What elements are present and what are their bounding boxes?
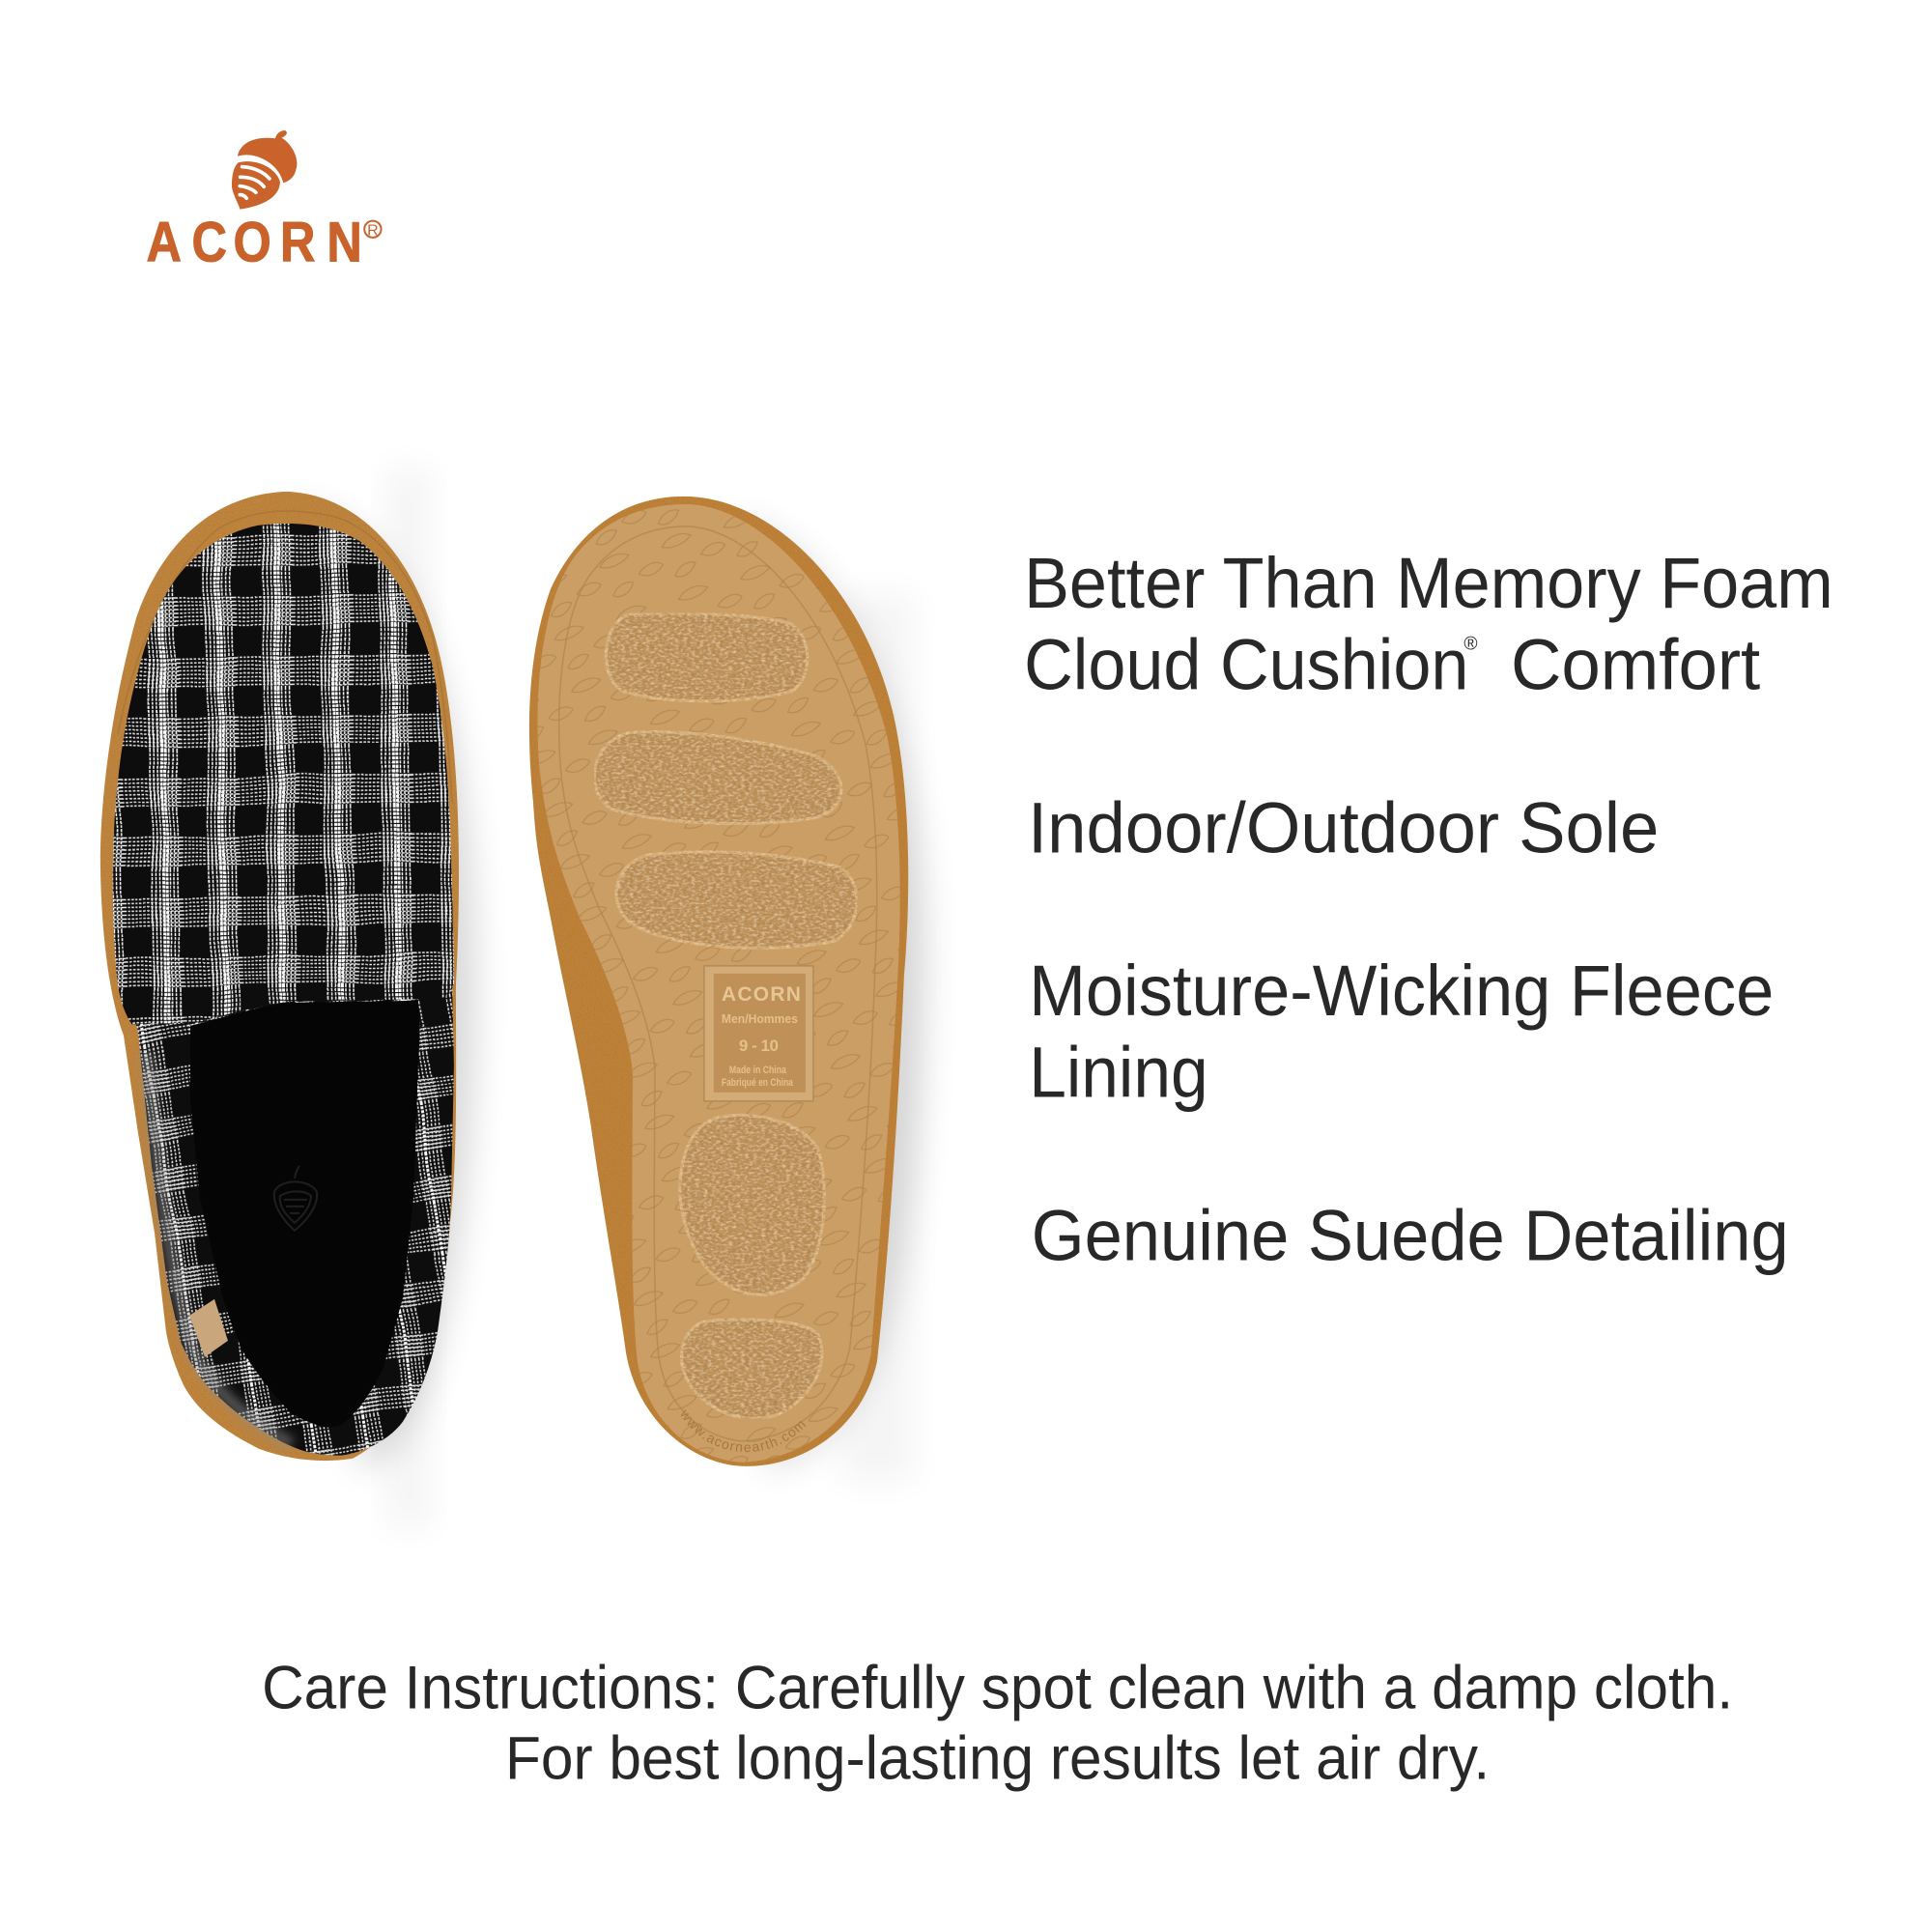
feature: cloud cushion: ® bbox=[1463, 635, 1477, 655]
stamp size text: Fabriqué en China bbox=[722, 1077, 794, 1089]
stamp size text: Made in China bbox=[729, 1065, 787, 1076]
registered mark: R bbox=[367, 223, 379, 240]
feature: fleece lining bbox=[1029, 951, 1774, 1113]
collar: plaid sides bbox=[136, 987, 454, 1456]
pad 3 bbox=[616, 852, 857, 948]
stamp wordmark: ACORN bbox=[722, 983, 801, 1006]
smooth tan sole bbox=[538, 504, 900, 1463]
pad 2 bbox=[594, 732, 841, 824]
feature: cloud cushion: Cloud Cushion bbox=[1024, 625, 1468, 705]
care instructions: Care Instructions: Carefully spot clean with a damp cloth. bbox=[262, 1655, 1733, 1722]
feature: fleece lining: Lining bbox=[1029, 1033, 1208, 1113]
size stamp bbox=[704, 966, 813, 1101]
logo: Acorn brand bbox=[147, 130, 382, 273]
stamp size text: Men/Hommes bbox=[722, 1011, 798, 1026]
right slipper: sole view bbox=[529, 497, 908, 1466]
feature: sole: Indoor/Outdoor Sole bbox=[1028, 787, 1659, 867]
suede outsole rim bbox=[100, 492, 459, 1461]
registered mark bbox=[364, 221, 382, 240]
feature: cloud cushion bbox=[1024, 625, 1761, 705]
feature: suede: Genuine Suede Detailing bbox=[1032, 1195, 1789, 1275]
stamp size text bbox=[722, 1011, 798, 1089]
care instructions: For best long-lasting results let air dry. bbox=[505, 1724, 1490, 1792]
left slipper: top view bbox=[97, 492, 473, 1463]
insole logo bbox=[274, 1166, 317, 1231]
suede stitched edge bbox=[118, 511, 452, 802]
embossed ridge line bbox=[559, 526, 877, 1441]
traction pads bbox=[594, 613, 857, 1418]
soft shadows behind slippers bbox=[297, 467, 926, 1529]
infographic canvas bbox=[100, 130, 1830, 1791]
wordmark: ACORN: ACORN bbox=[147, 210, 362, 273]
suede rim bbox=[529, 497, 908, 1466]
feature list bbox=[1024, 543, 1833, 1275]
stamp size text: 9 - 10 bbox=[739, 1037, 779, 1055]
fuzzy worn edge of collar bbox=[147, 1053, 292, 1444]
pad 5 bbox=[682, 1320, 822, 1418]
leaf embossing bbox=[522, 493, 908, 1468]
care instructions bbox=[262, 1655, 1733, 1792]
feature: cloud cushion: Comfort bbox=[1511, 625, 1761, 705]
pad 1 bbox=[606, 613, 808, 701]
plaid vamp bbox=[112, 524, 454, 1024]
leather tag bbox=[189, 1299, 228, 1357]
feature: memory foam: Better Than Memory Foam bbox=[1024, 543, 1833, 623]
icon: acorn bbox=[232, 130, 297, 210]
website imprint: www.acornearth.com bbox=[680, 1409, 806, 1453]
feature: fleece lining: Moisture-Wicking Fleece bbox=[1029, 951, 1774, 1031]
pad 4 bbox=[680, 1115, 824, 1294]
black fleece lining bbox=[190, 1001, 420, 1428]
